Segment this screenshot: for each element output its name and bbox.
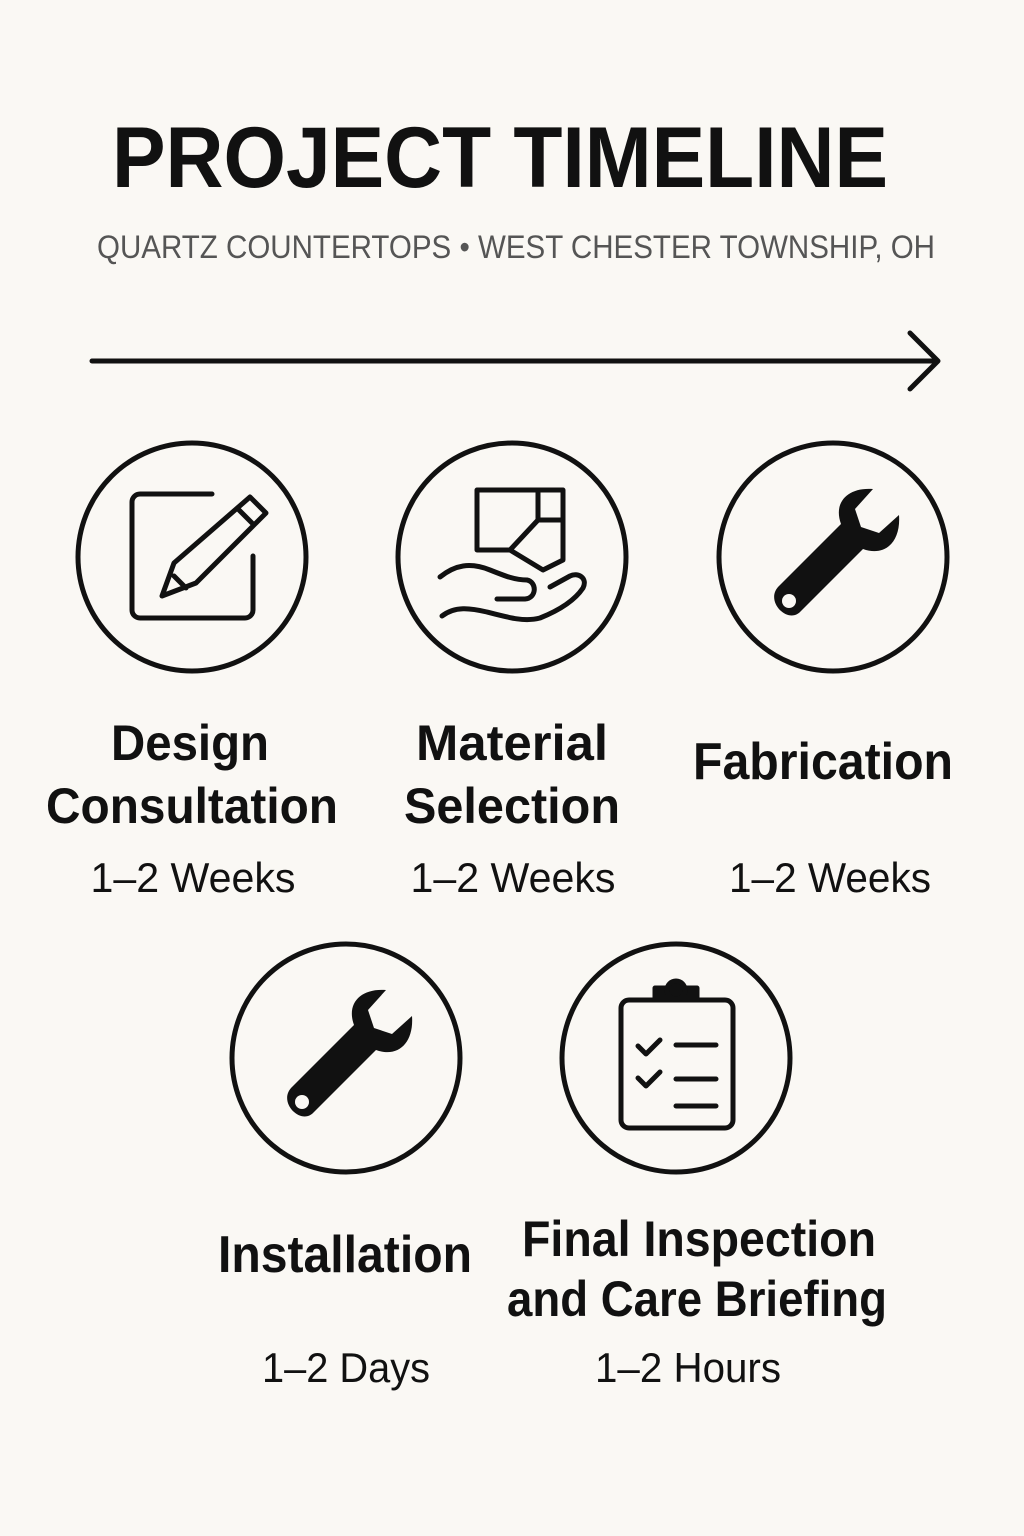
- label: Installation: [218, 1226, 472, 1284]
- icon: pencil on pad: [78, 443, 306, 671]
- duration: 1–2 Weeks: [729, 854, 931, 901]
- step: final inspection: and Care Briefing: [507, 1271, 887, 1327]
- label: Fabrication: [693, 733, 953, 791]
- step: installation: [218, 944, 472, 1391]
- arrow: timeline: [92, 333, 938, 389]
- duration: 1–2 Days: [262, 1344, 430, 1391]
- step: design consultation: [46, 443, 338, 901]
- icon: wrench: [232, 944, 460, 1172]
- subtitle: QUARTZ COUNTERTOPS • WEST CHESTER TOWNSHIP, OH: [97, 229, 935, 265]
- label: Material: [416, 715, 608, 771]
- label: Final Inspection: [522, 1211, 876, 1267]
- icon: wrench: [719, 443, 947, 671]
- step: final inspection: [507, 944, 887, 1391]
- duration: 1–2 Hours: [595, 1344, 781, 1391]
- step: material selection: [398, 443, 626, 901]
- label: Design: [111, 715, 269, 771]
- title: PROJECT TIMELINE: [112, 110, 888, 206]
- step: fabrication: [693, 443, 953, 901]
- icon: hand holding stone: [398, 443, 626, 671]
- step: design consultation: Consultation: [46, 778, 338, 834]
- duration: 1–2 Weeks: [90, 854, 296, 901]
- duration: 1–2 Weeks: [410, 854, 616, 901]
- step: material selection: Selection: [404, 778, 620, 834]
- icon: clipboard checklist: [562, 944, 790, 1172]
